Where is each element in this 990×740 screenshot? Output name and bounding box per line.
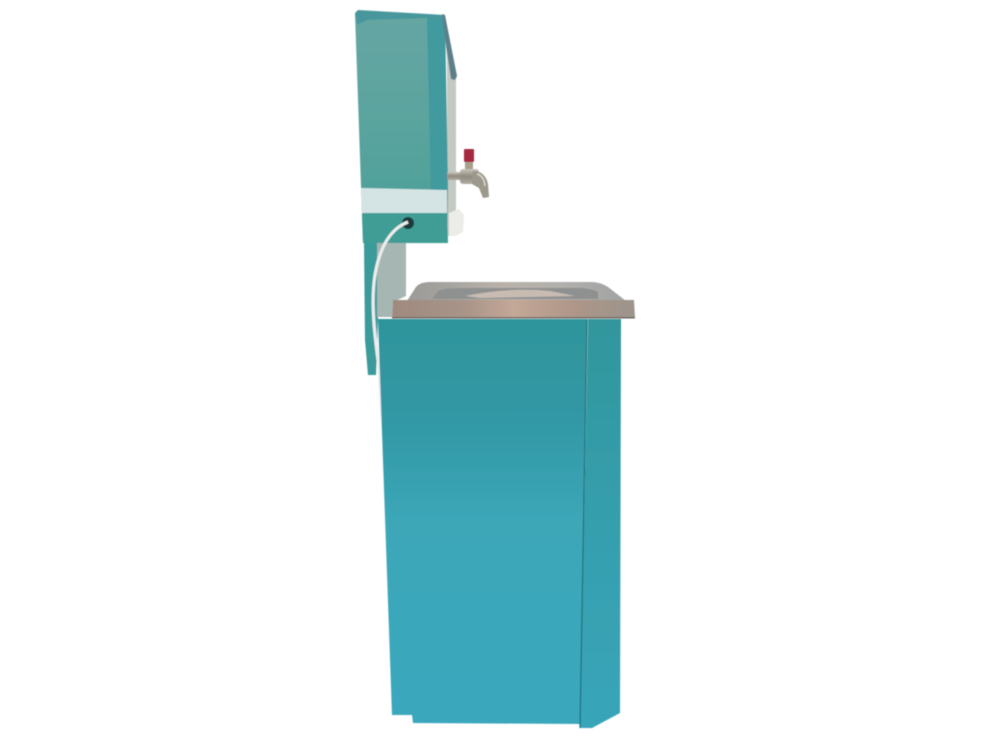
cabinet main side panel [378,319,587,724]
tank teal side strip [427,17,448,243]
mounting post [364,243,406,375]
white tape band [361,188,447,213]
faucet [447,149,489,198]
sink front rim [392,300,635,318]
tank grey side panel [444,16,456,236]
tank lower section [362,213,448,243]
cable grommet [402,217,414,229]
faucet valve cap [464,149,474,162]
tank top edge [355,10,446,24]
wall-mounted water tank [355,10,464,243]
faucet body [447,172,462,180]
tank sloped visor [442,14,457,80]
sink basin inner [432,288,598,299]
plug housing [449,209,464,236]
tank front face [355,11,448,243]
power cable [373,222,408,420]
cabinet [378,319,621,728]
faucet spout [472,171,489,198]
door gap line [580,319,587,728]
cabinet door edge [580,319,621,728]
stainless steel sink [392,282,635,318]
sink basin back rim [407,282,626,301]
